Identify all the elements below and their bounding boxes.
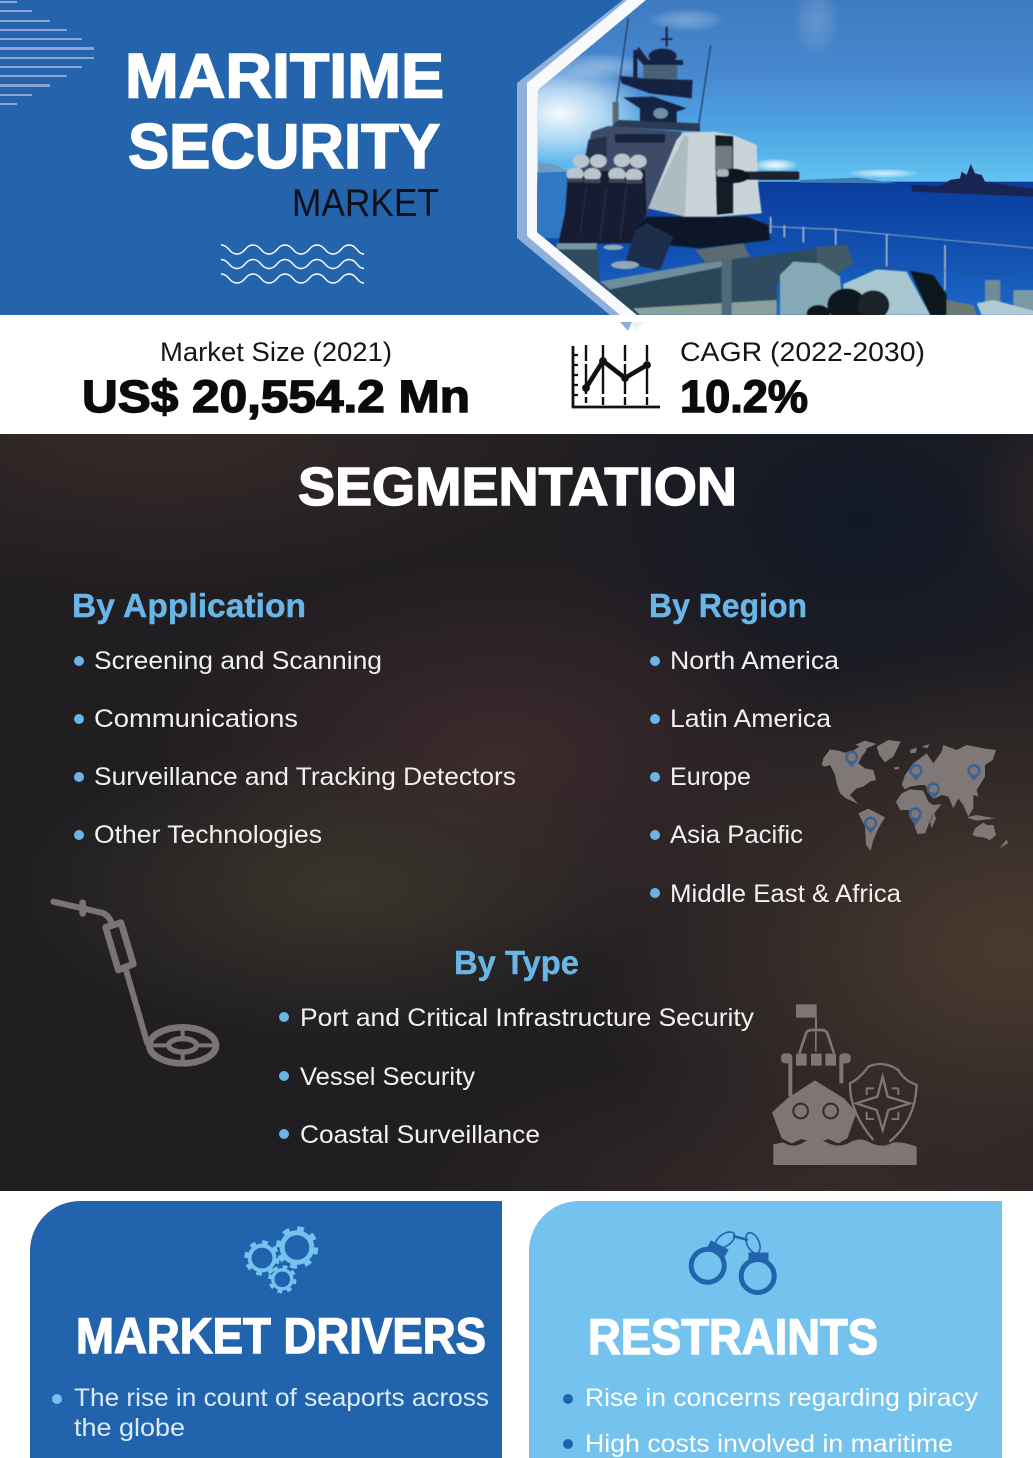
list: by region — [649, 587, 901, 908]
CAGR stat: 10.2% — [680, 371, 808, 422]
icon: world map with pins — [822, 740, 1008, 851]
CAGR stat: CAGR (2022-2030) — [680, 337, 925, 367]
stats band — [0, 315, 1033, 434]
winch — [780, 245, 1033, 322]
text: restraint bullets — [563, 1384, 979, 1458]
CAGR stat — [680, 337, 925, 422]
header banner — [0, 0, 1033, 322]
radar tower — [612, 27, 700, 132]
text: driver bullet: The rise in count of seaports across — [74, 1384, 489, 1412]
panel: restraints — [529, 1201, 1002, 1458]
market size stat: US$ 20,554.2 Mn — [82, 371, 470, 422]
list: by region: By Region — [649, 587, 807, 624]
list: by type: Port and Critical Infrastructure Security — [300, 1004, 755, 1032]
icon: metal detector — [53, 902, 216, 1063]
heading: restraints: RESTRAINTS — [588, 1309, 878, 1365]
list: by region: Asia Pacific — [670, 821, 803, 849]
market size stat: Market Size (2021) — [160, 337, 392, 367]
text: driver bullet: the globe — [74, 1414, 185, 1442]
market size stat — [82, 337, 470, 422]
text: driver bullet — [52, 1384, 489, 1442]
bridge — [567, 126, 682, 213]
sky — [527, 0, 1033, 183]
list: by region: Middle East & Africa — [670, 880, 901, 908]
list: by application: Other Technologies — [94, 821, 322, 849]
panel: segmentation — [0, 434, 1033, 1191]
icon: gears — [247, 1230, 315, 1291]
text: restraint bullets: High costs involved in maritime — [585, 1430, 953, 1458]
list: by application: Communications — [94, 705, 298, 733]
text: restraint bullets: Rise in concerns regarding piracy — [585, 1384, 979, 1412]
decoy launchers — [558, 154, 647, 243]
list: by region: North America — [670, 647, 839, 675]
turret base and deck — [557, 217, 833, 315]
list: by application: Screening and Scanning — [94, 647, 382, 675]
title: SECURITY — [128, 112, 440, 182]
gun turret — [648, 132, 799, 217]
list: by type: By Type — [454, 944, 579, 981]
icon: line chart — [573, 345, 660, 407]
title: MARKET — [292, 182, 439, 225]
sea — [527, 182, 1033, 315]
list: by application: Surveillance and Tracking Detectors — [94, 763, 516, 791]
railings — [771, 217, 1033, 290]
icon: ship and shield — [772, 1004, 917, 1165]
icon: handcuffs — [691, 1229, 774, 1292]
hexagon frame — [517, 0, 646, 315]
list: by application — [72, 587, 516, 849]
list: by region: Latin America — [670, 705, 831, 733]
heading: market drivers: MARKET DRIVERS — [76, 1308, 486, 1364]
panel: market drivers — [30, 1201, 502, 1458]
list: by type: Vessel Security — [300, 1063, 476, 1091]
title: MARITIME — [125, 42, 444, 112]
list: by type — [279, 944, 755, 1149]
decorative speed lines — [0, 1, 94, 105]
list: by application: By Application — [72, 587, 306, 624]
masts — [617, 18, 711, 123]
heading: segmentation: SEGMENTATION — [298, 457, 737, 517]
list: by region: Europe — [670, 763, 751, 791]
list: by type: Coastal Surveillance — [300, 1121, 540, 1149]
far ship — [911, 164, 1033, 197]
title — [125, 42, 444, 225]
photo: warship at sea — [537, 0, 1033, 315]
icon: waves — [221, 245, 364, 283]
